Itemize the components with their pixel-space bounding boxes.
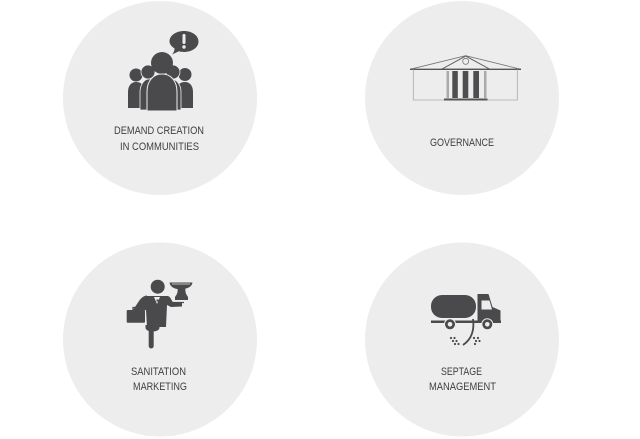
label: governance: GOVERNANCE [430, 137, 494, 149]
icon: septage truck [431, 294, 501, 345]
label: marketing: MARKETING [133, 381, 187, 393]
panel: sanitation marketing [63, 242, 257, 436]
label: demand creation: DEMAND CREATION [114, 125, 204, 137]
label: sanitation: SANITATION [131, 366, 186, 378]
icon: government building [410, 56, 521, 100]
panel: septage management [365, 242, 559, 436]
label: septage: SEPTAGE [441, 366, 482, 378]
icon: crowd with speech bubble [128, 31, 198, 111]
label: management: MANAGEMENT [429, 381, 496, 393]
icon: businessman with anvil [127, 280, 192, 348]
label: in communities: IN COMMUNITIES [120, 141, 199, 153]
panel: demand creation in communities [63, 1, 257, 195]
panel: governance [365, 1, 559, 195]
